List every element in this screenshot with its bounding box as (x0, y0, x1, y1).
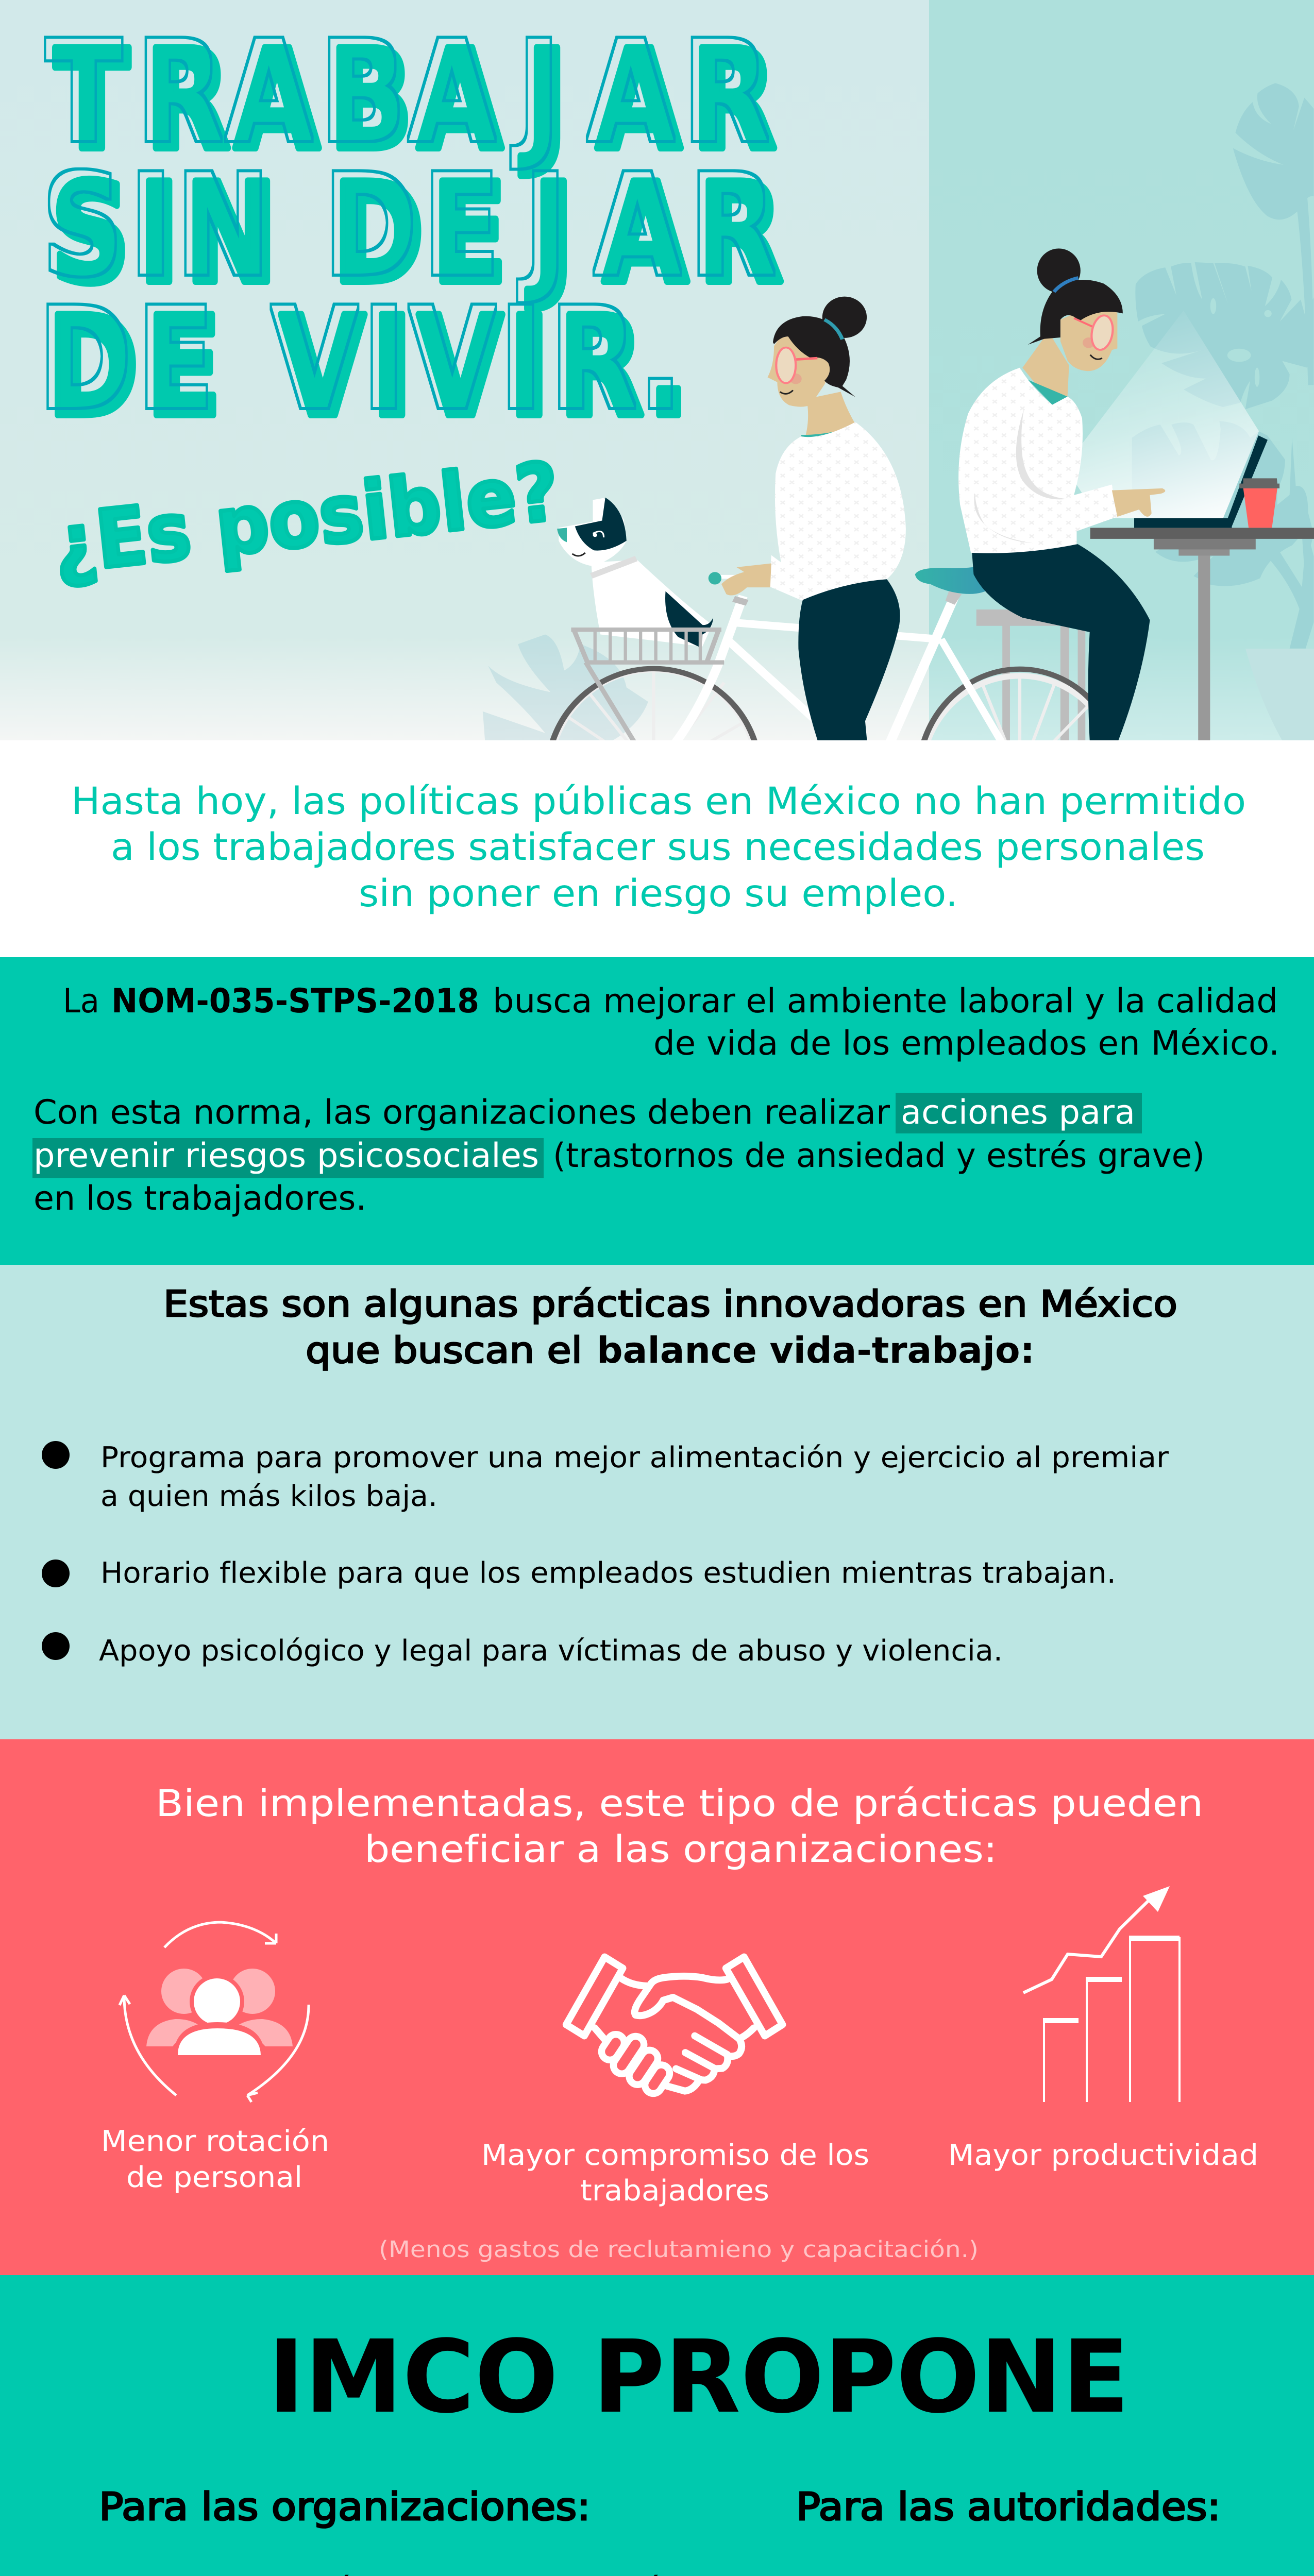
practices heading: Estas son algunas prácticas innovadoras en México (163, 1283, 1177, 1325)
bike frame (670, 577, 1006, 750)
coffee cup (1239, 478, 1279, 528)
icon: plant shadows right (1132, 83, 1314, 649)
laptop (1134, 435, 1268, 528)
practices heading (163, 1283, 1177, 1371)
saddle (915, 564, 999, 594)
norm text: en los trabajadores. (33, 1179, 366, 1218)
bullet list (42, 1441, 1169, 1668)
table (1090, 528, 1314, 750)
title: outline letters: SIN DEJAR (43, 145, 775, 306)
intro text: sin poner en riesgo su empleo. (359, 872, 958, 916)
person on bicycle (721, 297, 906, 750)
panel: benefits (0, 1739, 1314, 2275)
column: organizaciones (99, 2485, 684, 2576)
person at laptop (958, 248, 1165, 750)
title: filled letters (52, 44, 784, 418)
handlebar grip and clip (709, 572, 962, 606)
dog (557, 498, 713, 648)
norm text (33, 982, 1279, 1218)
bullet list: Horario flexible para que los empleados estudien mientras trabajan. (100, 1556, 1116, 1590)
illustration: cyclists, dog and desk (483, 248, 1314, 885)
laptop screen glow (1074, 311, 1259, 518)
intro text: a los trabajadores satisfacer sus necesidades personales (111, 825, 1205, 869)
panel: intro statement (0, 740, 1314, 957)
label: menor rotación: de personal (126, 2161, 302, 2194)
practices heading: balance vida-trabajo: (597, 1329, 1035, 1371)
hero left background (0, 0, 929, 740)
highlight: acciones para (896, 1093, 1142, 1133)
title: outline letters (44, 36, 776, 410)
label: mayor compromiso: Mayor compromiso de los (481, 2139, 869, 2172)
column: organizaciones: Para las organizaciones: (99, 2485, 591, 2529)
bullet list: Programa para promover una mejor alimentación y ejercicio al premiar (100, 1441, 1169, 1475)
norm text: acciones para (901, 1093, 1135, 1132)
icon: plant shadow left (483, 635, 648, 747)
panel: innovative practices (0, 1265, 1314, 1739)
label: menor rotación: Menor rotación (101, 2125, 329, 2158)
subtitle: ¿Es posible?: ¿Es posible? (49, 445, 563, 591)
icon: plant pot (1245, 649, 1314, 740)
panel: hero (0, 0, 1314, 740)
highlight: prevenir riesgos psicosociales (32, 1138, 544, 1178)
icon: people rotation (120, 1922, 309, 2102)
norm text: busca mejorar el ambiente laboral y la calidad (493, 982, 1278, 1021)
practices heading: que buscan el (306, 1329, 582, 1371)
label: mayor compromiso: trabajadores (580, 2174, 769, 2208)
heading: IMCO PROPONE: IMCO PROPONE (268, 2318, 1130, 2435)
intro text: Hasta hoy, las políticas públicas en México no han permitido (71, 779, 1246, 823)
label: mayor compromiso (481, 2139, 869, 2208)
label: mayor productividad: Mayor productividad (948, 2139, 1258, 2172)
norm text: NOM-035-STPS-2018 (111, 982, 479, 1021)
title: outline letters: DE VIVIR. (39, 279, 681, 439)
basket (571, 630, 724, 747)
hero right background (929, 0, 1314, 740)
norm text: prevenir riesgos psicosociales (33, 1137, 539, 1175)
norm text: La (63, 982, 99, 1021)
footnote: (Menos gastos de reclutamieno y capacitación.) (379, 2236, 979, 2263)
intro text (71, 779, 1246, 916)
stool (976, 609, 1087, 750)
norm text: Con esta norma, las organizaciones deben realizar (33, 1093, 890, 1132)
panel: NOM-035 norm (0, 957, 1314, 1265)
column: autoridades: Para las autoridades: (796, 2485, 1221, 2529)
norm text: de vida de los empleados en México. (653, 1024, 1279, 1063)
title: filled letters: TRABAJAR (55, 20, 777, 180)
title: filled letters: DE VIVIR. (47, 287, 689, 447)
benefits heading (156, 1782, 1203, 1871)
benefits heading: beneficiar a las organizaciones: (364, 1827, 997, 1871)
front wheel (547, 669, 760, 880)
bullet list: a quien más kilos baja. (100, 1480, 437, 1513)
norm text: (trastornos de ansiedad y estrés grave) (553, 1137, 1205, 1175)
rear wheel (918, 669, 1121, 885)
label: menor rotación (101, 2125, 329, 2194)
title: filled letters: SIN DEJAR (51, 154, 783, 314)
panel: IMCO propone (0, 2275, 1314, 2576)
column: autoridades (795, 2485, 1252, 2576)
bullet list: Apoyo psicológico y legal para víctimas de abuso y violencia. (99, 1634, 1003, 1668)
title: outline letters: TRABAJAR (46, 12, 768, 172)
benefits heading: Bien implementadas, este tipo de prácticas pueden (156, 1782, 1203, 1825)
icon: handshake (566, 1957, 783, 2091)
icon: growth chart (1023, 1886, 1180, 2102)
